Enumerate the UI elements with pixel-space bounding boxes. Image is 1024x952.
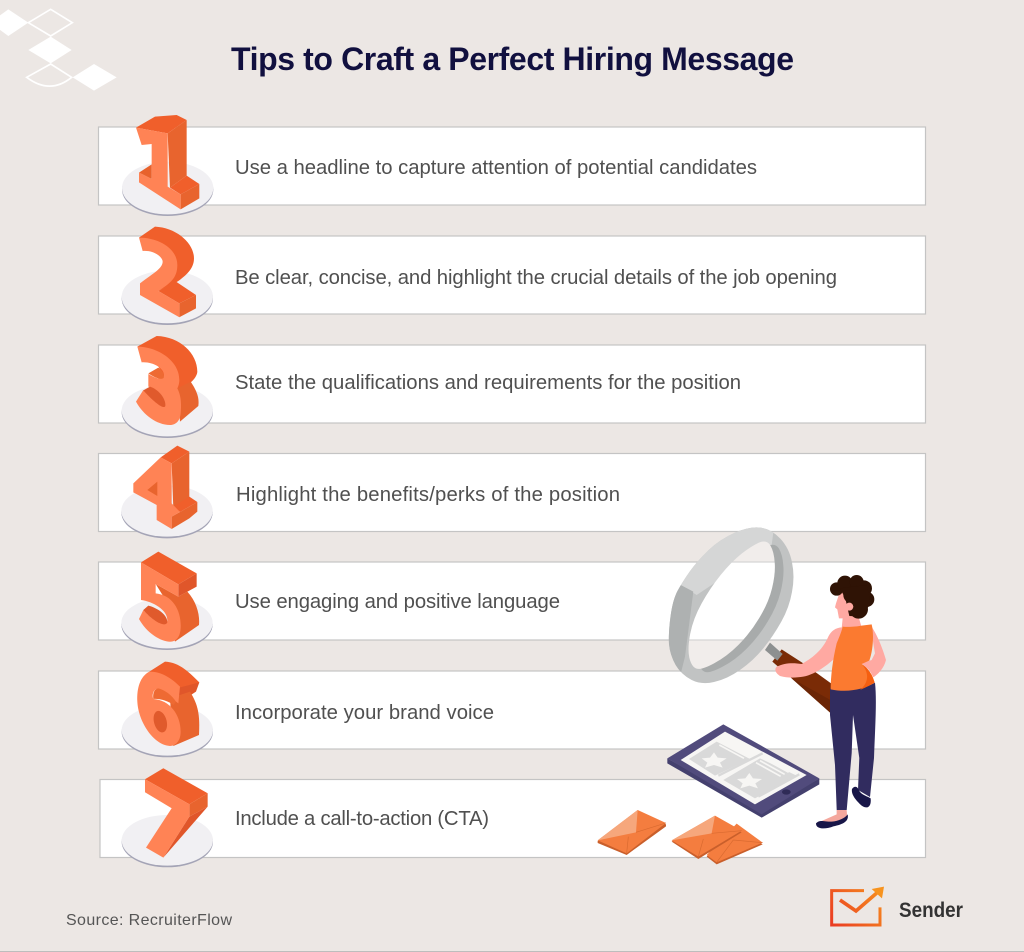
envelope 1 — [598, 810, 666, 855]
tip 6 text: Incorporate your brand voice — [235, 702, 494, 724]
tip 7 text: Include a call-to-action (CTA) — [235, 808, 489, 830]
magnifier connector — [765, 643, 783, 661]
front arm and hand — [775, 627, 847, 678]
decorative diamonds — [0, 9, 117, 91]
illustration: person — [775, 575, 886, 828]
logo icon — [832, 887, 884, 925]
number 3 — [122, 336, 213, 438]
panel: tip rows — [98, 127, 926, 858]
magnifier lens — [689, 541, 775, 669]
title: Tips to Craft a Perfect Hiring Message — [231, 41, 794, 77]
feet — [816, 787, 871, 828]
ear — [845, 603, 853, 611]
envelope 3 — [707, 824, 763, 864]
neck and face — [835, 592, 862, 628]
number 6 — [122, 662, 213, 757]
logo wordmark: Sender — [899, 898, 964, 922]
shirt — [831, 624, 875, 691]
number 2 — [122, 227, 213, 325]
number 7 — [122, 768, 213, 867]
number 4 — [121, 446, 213, 538]
illustration: tablet — [667, 724, 819, 818]
tip 3 text: State the qualifications and requirements for the position — [235, 372, 741, 394]
magnifier handle — [772, 649, 833, 714]
hair — [830, 575, 874, 619]
tip 5 text: Use engaging and positive language — [235, 591, 560, 613]
logo: Sender — [832, 887, 964, 925]
illustration: magnifying glass — [669, 527, 833, 714]
illustration: envelopes — [598, 810, 763, 864]
tip 4 text: Highlight the benefits/perks of the position — [236, 484, 620, 506]
source note: Source: RecruiterFlow — [66, 912, 232, 929]
tip 1 text: Use a headline to capture attention of potential candidates — [235, 157, 757, 179]
number 1 — [122, 115, 213, 216]
tip 2 text: Be clear, concise, and highlight the crucial details of the job opening — [235, 267, 837, 289]
back arm — [862, 625, 886, 677]
pants — [830, 683, 876, 810]
magnifier ring — [669, 527, 793, 683]
number 5 — [121, 552, 213, 650]
envelope 2 — [672, 816, 742, 859]
